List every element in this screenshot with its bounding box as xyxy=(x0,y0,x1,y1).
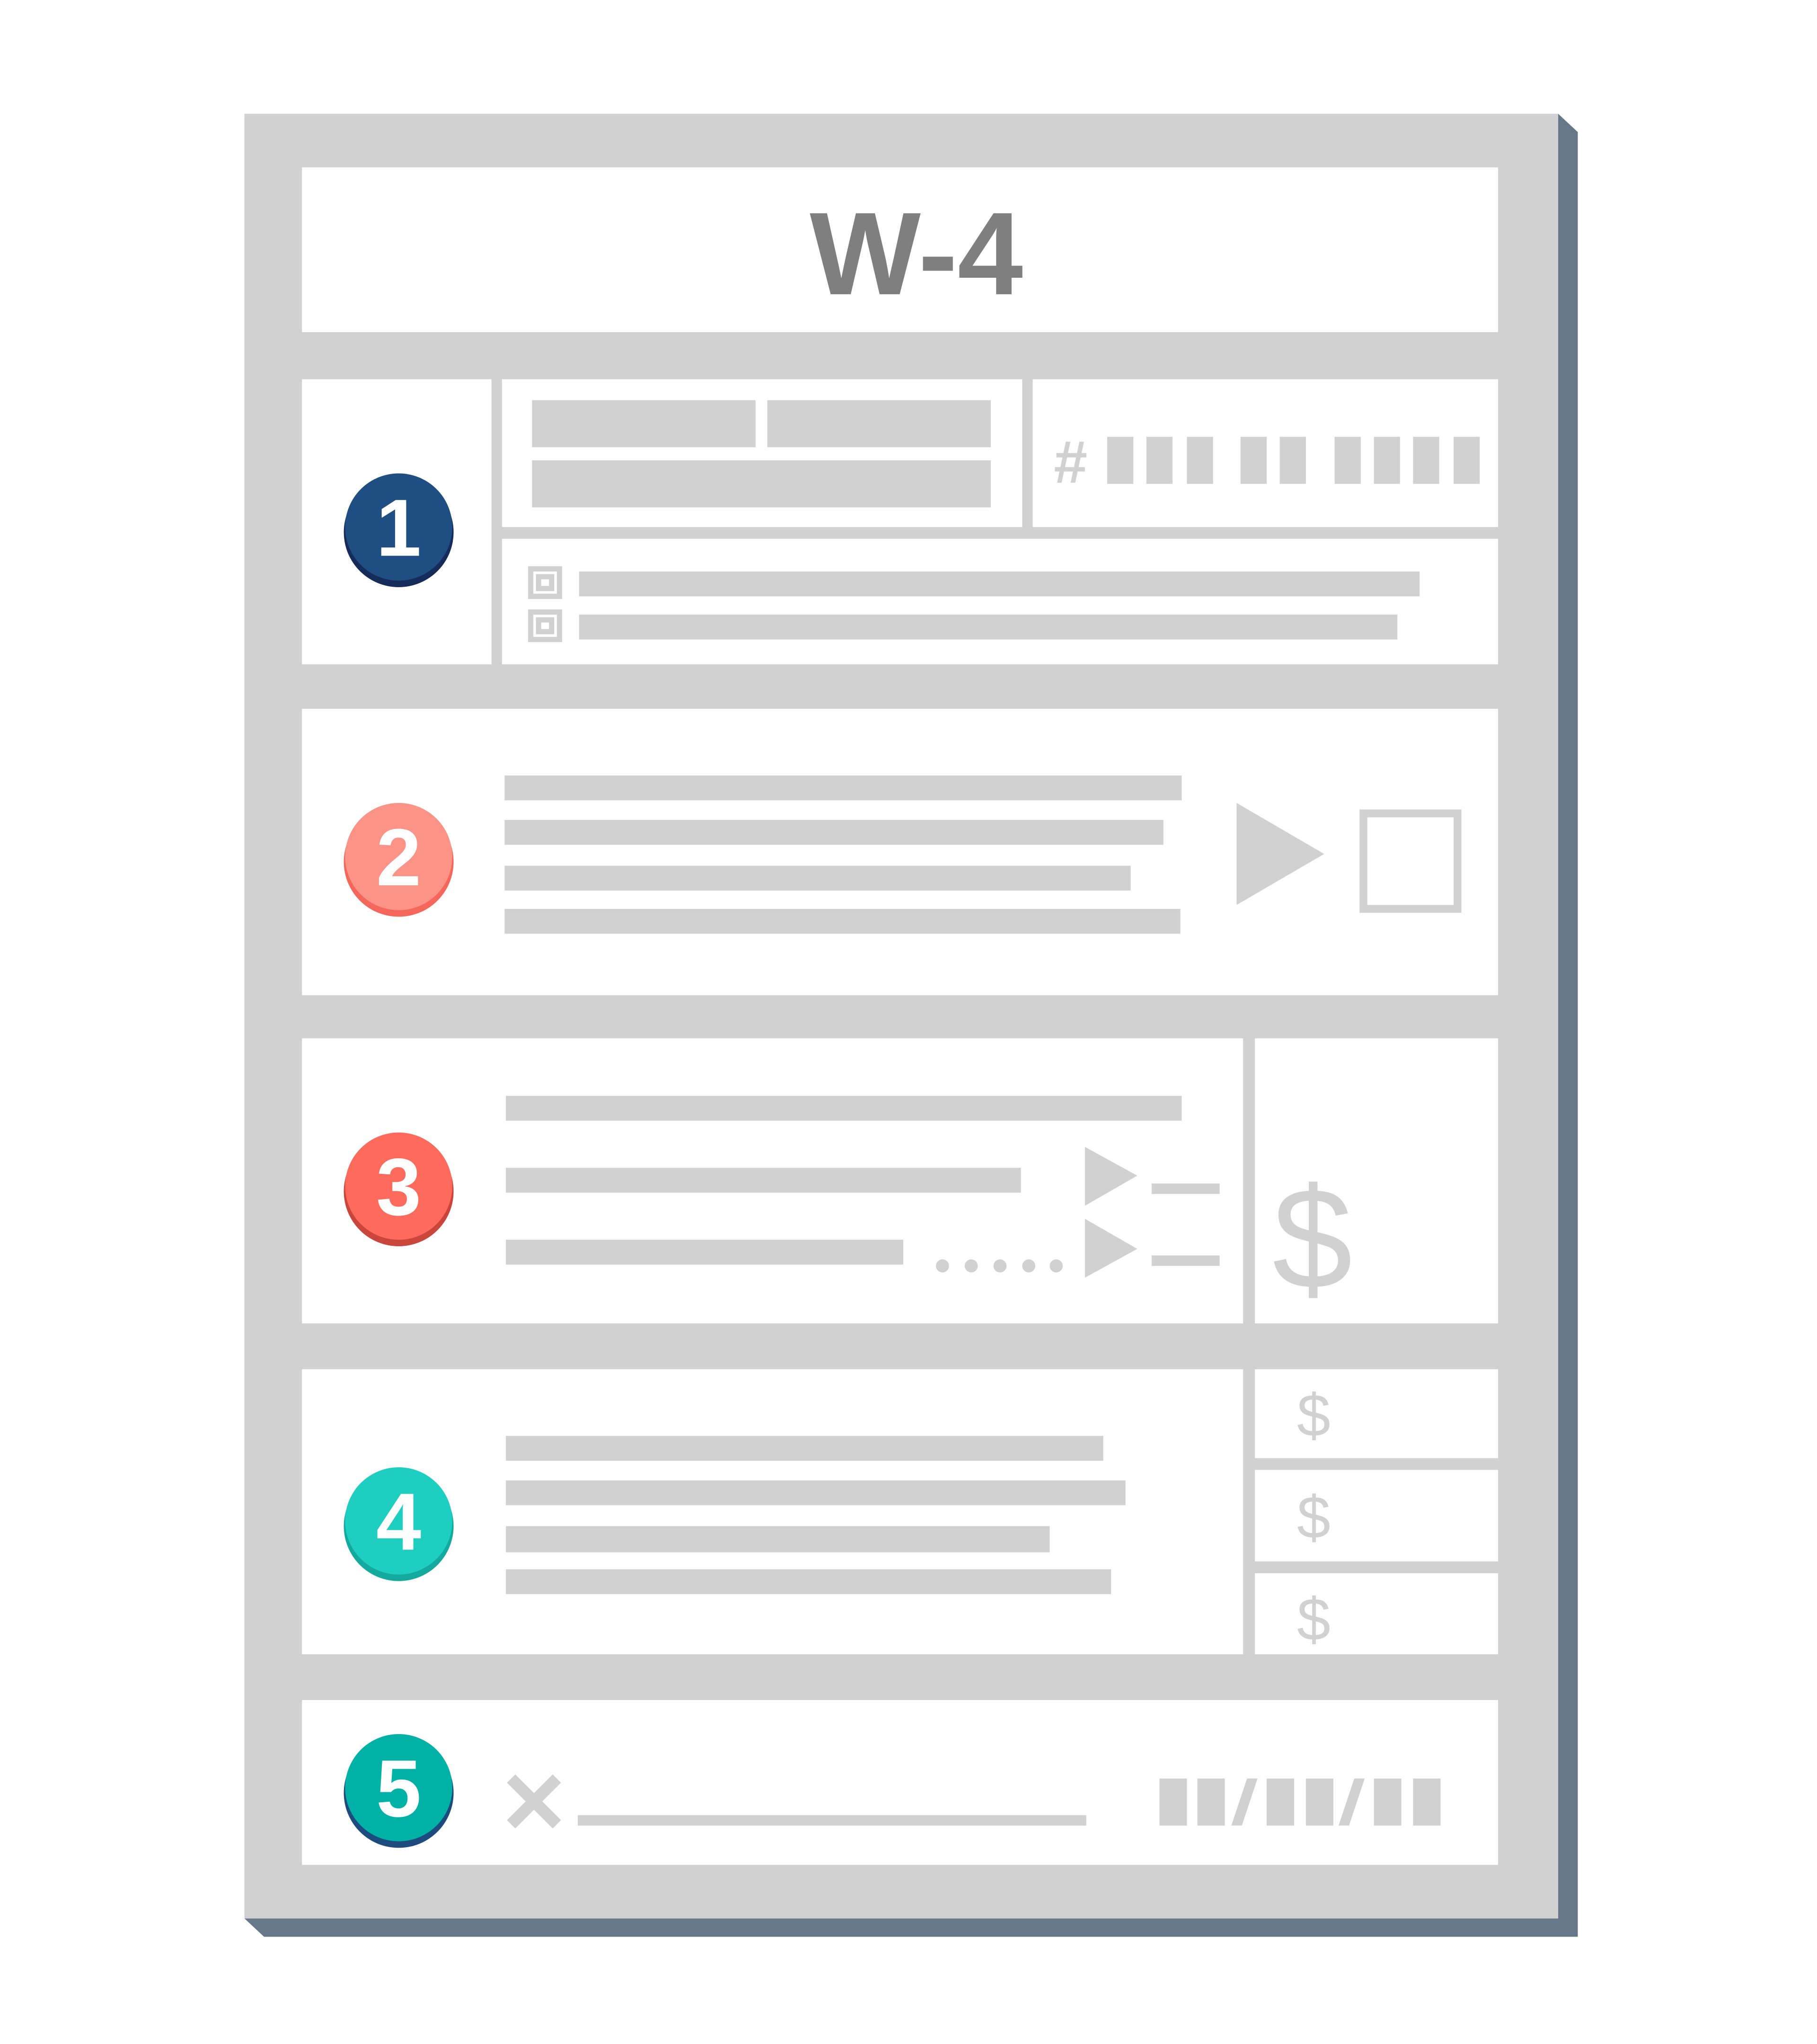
section 2 xyxy=(302,709,1498,995)
badge 3 xyxy=(344,1133,454,1246)
checkboxes xyxy=(531,569,559,640)
badge 1 xyxy=(344,474,454,587)
badge 2: 2 xyxy=(376,812,421,903)
badge 1: 1 xyxy=(376,483,421,573)
section 4 xyxy=(302,1369,1498,1654)
badge 3: 3 xyxy=(376,1142,421,1233)
paper xyxy=(245,114,1558,1919)
section 4: $ xyxy=(1297,1483,1331,1551)
badge 5: 5 xyxy=(376,1744,421,1834)
badge 2 xyxy=(344,803,454,917)
paper shadow xyxy=(245,114,1578,1937)
checkbox xyxy=(1363,813,1457,909)
date xyxy=(1159,1779,1440,1825)
badge 5 xyxy=(344,1734,454,1848)
dollar sign: $ xyxy=(1272,1158,1352,1319)
section 5 xyxy=(302,1700,1498,1865)
section 1 xyxy=(302,379,1498,664)
SSN field: # xyxy=(1054,428,1087,495)
title: W-4 xyxy=(810,188,1023,319)
section 4: $ xyxy=(1297,1382,1331,1449)
badge 4: 4 xyxy=(376,1477,421,1567)
arrow xyxy=(1236,803,1324,905)
badge 4 xyxy=(344,1467,454,1581)
title box xyxy=(302,167,1498,332)
section 4: $ xyxy=(1297,1586,1331,1653)
signature X xyxy=(511,1779,557,1824)
SSN field xyxy=(1054,428,1480,495)
section 3 xyxy=(302,1039,1498,1323)
